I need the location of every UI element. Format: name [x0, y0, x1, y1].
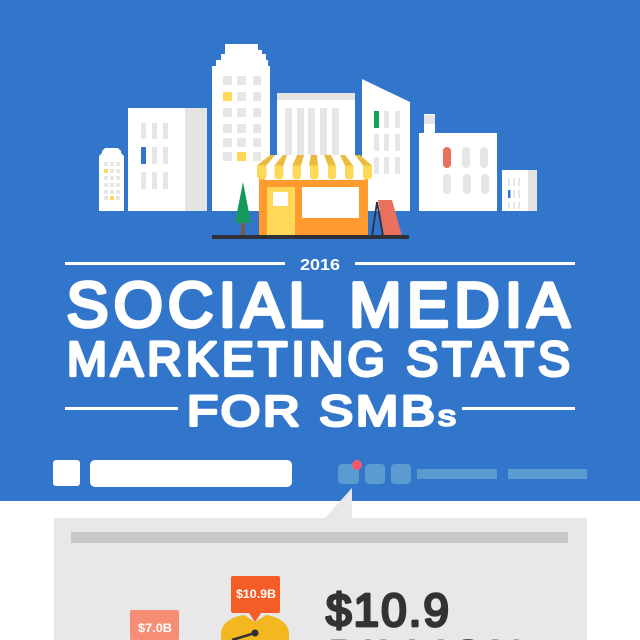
icon: tree: [235, 182, 251, 236]
panel heading bar: [71, 532, 568, 543]
notification dot: [352, 460, 362, 470]
building: small tower: [99, 148, 124, 211]
building: chimney block with arched windows: [419, 114, 497, 211]
building: small block right: [502, 170, 537, 211]
callout: $10.9B: [231, 576, 280, 622]
awning: [257, 155, 372, 180]
building: slanted roof: [362, 79, 410, 211]
ground line: [212, 235, 409, 239]
title block: [65, 257, 575, 435]
illustration: city skyline with storefront: [99, 44, 537, 239]
search bar: [90, 460, 292, 487]
storefront: [257, 155, 372, 236]
callout: $10.9B: $10.9B: [236, 589, 276, 601]
title line: SOCIAL MEDIA: SOCIAL MEDIA: [66, 270, 570, 340]
building: columned block: [277, 93, 355, 211]
title line: MARKETING STATS: MARKETING STATS: [67, 334, 570, 386]
title line: FOR SMBs with rules: [65, 386, 575, 435]
callout: $7.0B: [130, 610, 179, 640]
building: tall stepped tower: [212, 44, 270, 211]
stat: $10.9 billion: [326, 584, 522, 640]
year label with rules: 2016: [300, 257, 340, 274]
gauge icon: [221, 615, 289, 640]
title line: FOR SMBs with rules: FOR SMB: [187, 386, 435, 435]
building: office block with grey side: [128, 108, 207, 211]
social media nav bar: [53, 460, 587, 487]
title line: FOR SMBs with rules: s: [438, 400, 456, 432]
stat: $10.9 billion: $10.9: [326, 584, 449, 636]
year label with rules: [65, 257, 575, 274]
nav icons: [338, 464, 587, 484]
callout: $7.0B: $7.0B: [138, 623, 172, 635]
stat panel: [54, 488, 587, 640]
blue header background: [0, 0, 640, 501]
icon: A-frame sign: [372, 200, 402, 236]
logo square: [53, 460, 80, 486]
